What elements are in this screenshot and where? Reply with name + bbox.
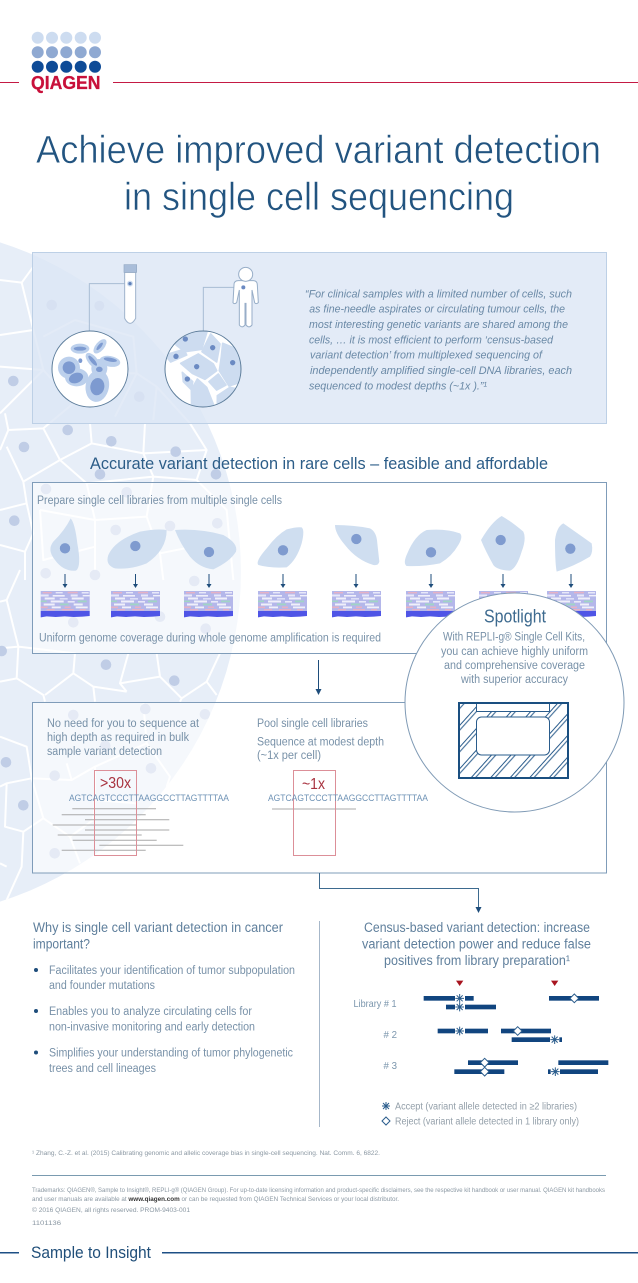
legal text: 1101136: [32, 1220, 61, 1227]
icon: blood sample circle: [52, 331, 128, 407]
library labels: Library # 1: [354, 998, 397, 1010]
callout: spotlight: [405, 593, 624, 812]
title: Achieve improved variant detection: [36, 129, 601, 172]
title: [36, 129, 601, 219]
spotlight text: and comprehensive coverage: [444, 660, 585, 672]
quote text: as fine-needle aspirates or circulating tumour cells, the: [309, 304, 565, 316]
text: no need for high depth: high depth as required in bulk: [47, 732, 189, 744]
tagline: sample to insight: Sample to Insight: [31, 1243, 151, 1262]
chart: deep sequencing reads: [53, 770, 230, 856]
legal text: © 2016 QIAGEN, all rights reserved. PROM-9403-001: [32, 1206, 190, 1214]
library labels: # 3: [384, 1060, 397, 1072]
census diagram: [424, 981, 608, 1076]
connector arrow to census section: [320, 873, 482, 913]
library labels: # 2: [384, 1029, 397, 1041]
chart: deep sequencing reads: AGTCAGTCCCTTAAGGCCTTAGTTTTAA: [69, 793, 230, 804]
chart: modest sequencing reads: [268, 770, 429, 856]
text: pool libraries: [257, 718, 384, 762]
spotlight text: you can achieve highly uniform: [441, 646, 588, 658]
library labels: [354, 998, 397, 1072]
text: pool libraries: (~1x per cell): [257, 750, 321, 762]
bullet list: non-invasive monitoring and early detection: [49, 1022, 255, 1034]
census heading: variant detection power and reduce false: [362, 936, 591, 952]
quote text: sequenced to modest depths (~1x ).”¹: [309, 380, 487, 392]
legal text: Trademarks: QIAGEN®, Sample to Insight®, REPLI-g® (QIAGEN Group). For up-to-date licensing information and product-specific disclaimers, see the respective kit handbook or user manual. QIAGEN kit handbooks: [32, 1186, 606, 1194]
arrows: cell to library: [62, 574, 574, 588]
panel: quote: [32, 252, 606, 424]
census heading: Census-based variant detection: increase: [364, 920, 590, 935]
cells row 1: [50, 518, 303, 571]
quote text: variant detection’ from multiplexed sequencing of: [310, 350, 543, 362]
text: no need for high depth: [47, 718, 200, 758]
icon: single cell kit box: [459, 703, 568, 778]
bullet list: Simplifies your understanding of tumor phylogenetic: [49, 1048, 293, 1060]
spotlight text: With REPLI-g® Single Cell Kits,: [443, 632, 585, 644]
section: why single cell variant detection: [33, 920, 295, 1075]
text: no need for high depth: sample variant detection: [47, 746, 162, 758]
chart: modest sequencing reads: ~1x: [302, 776, 325, 793]
quote text: [305, 288, 572, 392]
census heading: [362, 920, 591, 968]
icon: human figure: [203, 267, 258, 331]
legal text: [32, 1186, 606, 1227]
bullet list: Enables you to analyze circulating cells for: [49, 1006, 252, 1018]
legal text: and user manuals are available at www.qiagen.com or can be requested from QIAGEN Technical Services or your local distributor.: [32, 1196, 399, 1203]
legend: Accept (variant allele detected in ≥2 libraries): [395, 1102, 577, 1112]
section heading: [33, 920, 283, 952]
panel: prepare libraries: [32, 482, 606, 654]
text: no need for high depth: No need for you to sequence at: [47, 718, 200, 730]
spotlight text: with superior accuracy: [460, 674, 568, 686]
heading: accurate variant detection: Accurate variant detection in rare cells – feasible and affordable: [90, 454, 548, 473]
spotlight heading: Spotlight: [484, 606, 546, 627]
quote text: “For clinical samples with a limited number of cells, such: [305, 288, 572, 300]
logo: QIAGEN: QIAGEN: [31, 72, 100, 93]
title: in single cell sequencing: [124, 176, 514, 219]
background: large cell circle: [0, 220, 245, 910]
census heading: positives from library preparation¹: [384, 953, 570, 968]
chart: modest sequencing reads: AGTCAGTCCCTTAAGGCCTTAGTTTTAA: [268, 793, 429, 804]
legend: [382, 1102, 579, 1128]
text: uniform coverage: Uniform genome coverage during whole genome amplification is required: [39, 632, 381, 644]
text: prepare libraries: Prepare single cell libraries from multiple single cells: [37, 495, 282, 507]
legend: Reject (variant allele detected in 1 library only): [395, 1116, 579, 1128]
panel: sequencing depth: [32, 702, 606, 873]
text: pool libraries: Pool single cell libraries: [257, 718, 368, 730]
text: pool libraries: Sequence at modest depth: [257, 736, 384, 748]
quote text: most interesting genetic variants are shared among the: [309, 319, 568, 331]
section heading: Why is single cell variant detection in cancer: [33, 920, 283, 935]
bullet list: Facilitates your identification of tumor subpopulation: [49, 965, 295, 977]
logo: QIAGEN: [31, 32, 101, 93]
quote text: independently amplified single-cell DNA libraries, each: [310, 365, 572, 377]
arrow: panel to panel: [316, 660, 322, 695]
footnote: ¹ Zhang, C.-Z. et al. (2015) Calibrating genomic and allelic coverage bias in single-cell sequencing. Nat. Comm. 6, 6822.: [32, 1150, 380, 1157]
cells row 2: [335, 516, 592, 572]
chart: deep sequencing reads: >30x: [100, 775, 131, 792]
bullet list: [34, 965, 295, 1075]
icon: test tube: [89, 265, 137, 331]
section heading: important?: [33, 936, 90, 952]
bullet list: and founder mutations: [49, 980, 155, 992]
bullet list: trees and cell lineages: [49, 1063, 156, 1075]
genome coverage thumbnails: [41, 591, 596, 617]
section: census-based variant detection: [354, 920, 608, 1128]
spotlight text: [441, 632, 588, 686]
icon: tissue circle: [165, 331, 243, 408]
quote text: cells, … it is most efficient to perform ‘census-based: [309, 334, 554, 346]
